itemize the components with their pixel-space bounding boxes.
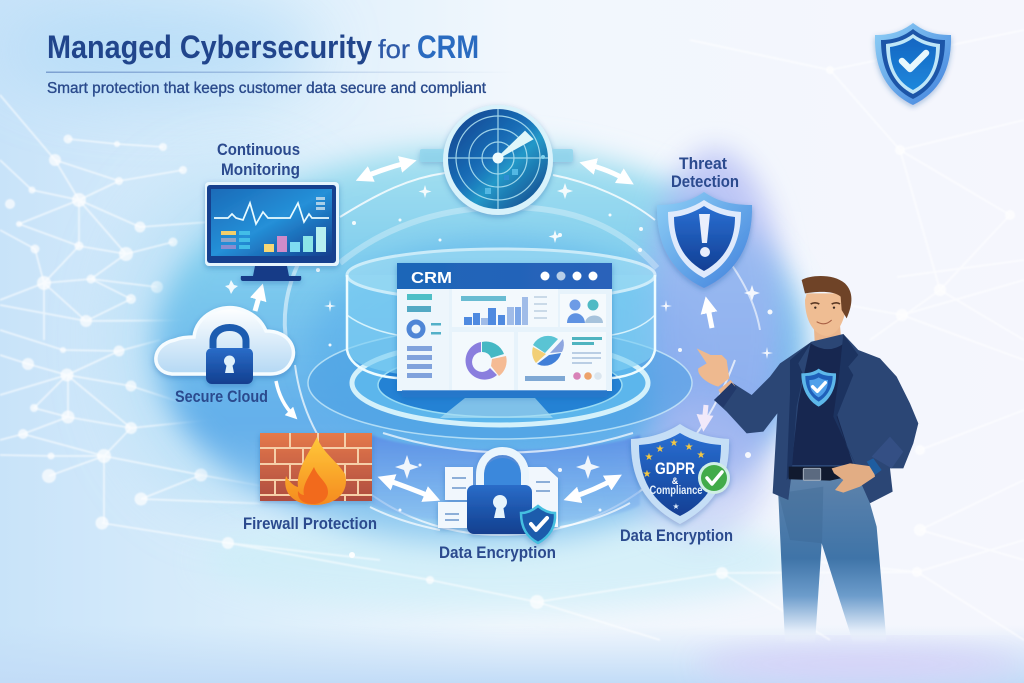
arrow: firewall to encryption [384, 479, 434, 498]
glass cylinder [347, 249, 655, 380]
subtitle: Smart protection that keeps customer data secure and compliant [47, 80, 487, 97]
platform rings [308, 327, 692, 439]
label: threat detection: Threat [679, 154, 727, 173]
title: for [378, 34, 410, 64]
CRM dashboard: CRM [411, 270, 452, 287]
bar chart [452, 289, 558, 327]
cuff [714, 383, 737, 407]
icon: GDPR shield: ★ [656, 444, 665, 455]
icon: GDPR shield: ★ [645, 452, 654, 463]
users card [560, 294, 606, 327]
icon: secure cloud [156, 308, 293, 384]
lower glow band [370, 433, 640, 530]
arrow: encryption to compliance [570, 478, 616, 498]
arrows around cycle [255, 162, 712, 498]
radar icon [420, 105, 573, 215]
person [697, 276, 918, 643]
title: CRM [417, 29, 479, 65]
label: firewall: Firewall Protection [243, 514, 377, 533]
t-shirt [792, 343, 853, 465]
icon: corner shield [875, 23, 951, 105]
pie chart card [518, 332, 606, 390]
label: threat detection [671, 154, 739, 191]
pants [777, 473, 887, 643]
neck [814, 325, 842, 352]
icon: GDPR shield: ★ [697, 450, 706, 461]
particles [225, 183, 773, 558]
CRM platform [308, 249, 692, 439]
label: threat detection: Detection [671, 172, 739, 191]
icon: monitor [205, 182, 339, 281]
label: data encryption center: Data Encryption [439, 543, 556, 562]
label: data encryption right: Data Encryption [620, 526, 733, 545]
icon: firewall [260, 433, 372, 505]
orbit rings [285, 173, 760, 535]
arrow: to threat [707, 303, 712, 328]
arrow: cloud to firewall [276, 381, 294, 416]
icon: data encryption [438, 451, 558, 543]
arrow: monitoring to radar [362, 162, 410, 178]
title: Managed Cybersecurity [47, 29, 372, 65]
hand right [832, 463, 875, 493]
icon: GDPR shield: Compliance [650, 483, 703, 497]
head [805, 293, 847, 336]
icon: GDPR shield: ★ [685, 442, 694, 453]
CRM dashboard [397, 263, 612, 397]
shirt shield [801, 369, 836, 407]
jacket [714, 334, 918, 503]
label: continuous monitoring: Continuous [217, 140, 300, 159]
icon: GDPR shield: & [672, 476, 679, 486]
donut chart [452, 332, 514, 390]
arrow: radar to threat [586, 164, 628, 181]
network nodes [5, 66, 1015, 609]
central glow [155, 145, 805, 545]
icon: GDPR shield: GDPR [655, 459, 695, 478]
lapels [787, 334, 858, 480]
label: continuous monitoring: Monitoring [221, 160, 300, 179]
sidebar [397, 289, 449, 390]
arrow: cloud to monitor [255, 290, 261, 311]
label: continuous monitoring [217, 140, 300, 179]
icon: GDPR shield: ★ [670, 438, 679, 449]
wrist and hand left [718, 380, 735, 399]
belt [789, 467, 848, 481]
icon: GDPR shield: ★ [643, 469, 652, 480]
icon: GDPR shield: ★ [672, 502, 680, 511]
label: secure cloud: Secure Cloud [175, 387, 268, 406]
icon: GDPR shield [631, 424, 730, 524]
icon: threat shield [657, 192, 752, 288]
arrow: to compliance [704, 405, 706, 425]
